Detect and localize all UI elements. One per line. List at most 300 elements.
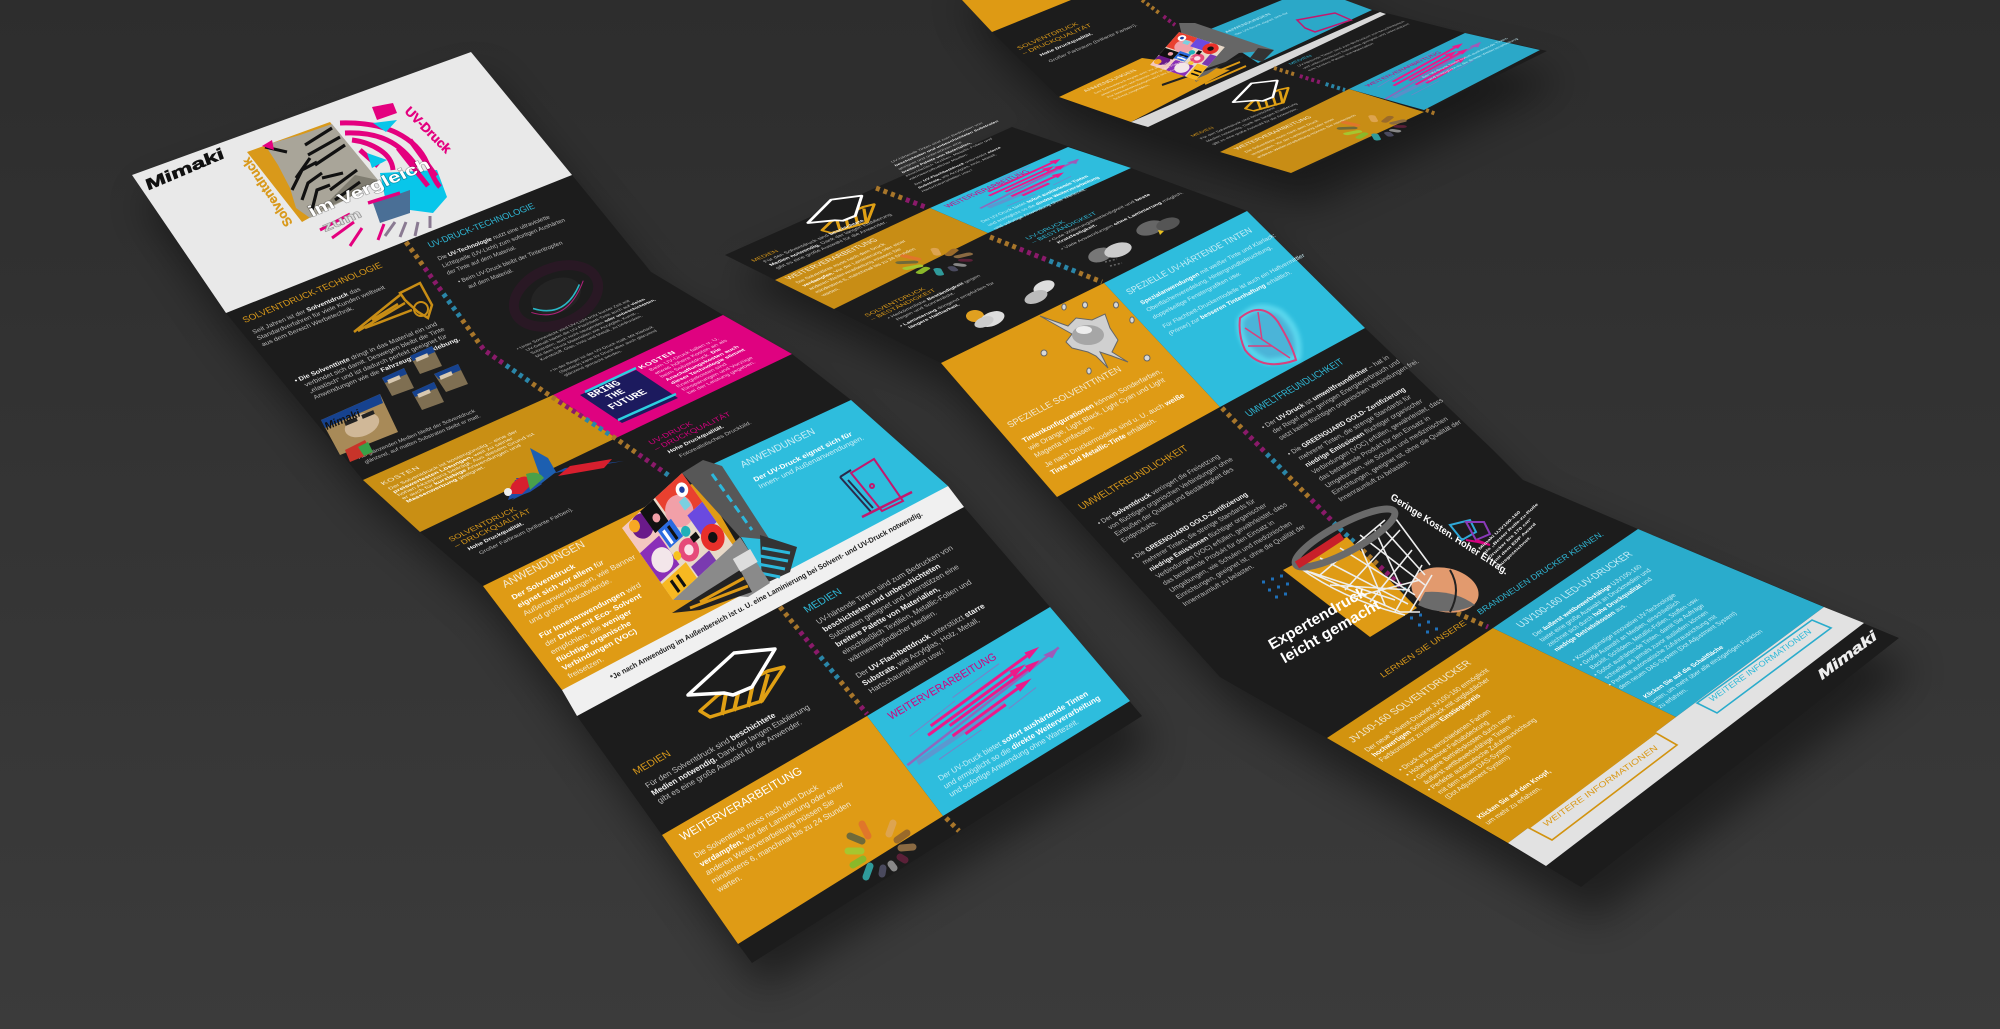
icons: sun and cloud (966, 278, 1056, 330)
text block: medien solvent: Medien notwendig. Dank der langen Etablierung (649, 703, 812, 797)
text block: medien uv: Der UV-Flachbettdruck unterstützt starre (854, 602, 987, 680)
panel: gold spezielle solventtinten (941, 283, 1220, 497)
panel: sheet 1, left brochure (132, 52, 1142, 963)
text: anwendungen small: ANWENDUNGEN (1082, 69, 1139, 93)
panel: gold weiterverarbeitung: verdampfen. Vor der Laminierung oder einer (698, 780, 846, 868)
panel: magenta kosten: Einsparungen und Vorzüge (681, 356, 755, 392)
illustration: bring the future: THE (603, 388, 629, 401)
text block: umweltfreundlichkeit uv: UMWELTFREUNDLICHKEIT (1243, 357, 1347, 419)
panel: cyan spezielle uv-härtende tinten: doppelseitige Fenstergrafiken usw. (1151, 271, 1243, 321)
panel: magenta kosten: beim Solventdruck. Die (659, 347, 724, 379)
icon: spinner small (1331, 113, 1420, 142)
button: weitere informationen gold: WEITERE INFORMATIONEN (1541, 743, 1660, 828)
panel: gold kosten strip (962, 0, 1071, 32)
text: solvent quality small (1016, 4, 1139, 69)
panel: sheet 2, middle brochure (725, 116, 1899, 887)
text: weiterverarbeitung gold small: verdampfen. Vor der Laminierung oder einer (1249, 118, 1336, 156)
logo: Mimaki white: Mimaki (1814, 627, 1881, 682)
panel: cyan weiterverarbeitung small: und ermöglicht so die direkte Weiterverarbeitung (986, 176, 1101, 227)
text block: medien uv small: UV-härtende Tinten sind zum Bedrucken von (890, 121, 984, 164)
panel: sheet 3, top right brochure (962, 0, 1547, 175)
text: UV-Druck: UV-Druck (402, 104, 455, 157)
button: weitere informationen gold (1529, 733, 1677, 840)
text block: uv beständigkeit: • Gute Witterungsbeständigkeit und beste (1047, 193, 1152, 243)
text block: medien uv: Hartschaumplatten usw.! (866, 647, 947, 695)
panel: cyan anwendungen: Der UV-Druck eignet sich für (752, 430, 854, 483)
panel: cyan weiterverarbeitung: Der UV-Druck bietet sofort aushärtende Tinten (936, 689, 1090, 783)
text block: uv druckqualität: Hohe Druckqualität. (667, 424, 726, 455)
text block: medien solvent small: MEDIEN (750, 249, 781, 263)
text block: solventdruck technologie: glänzend, auf matten Substraten bleibt er matt. (364, 414, 483, 465)
panel: gold kosten: KOSTEN (379, 465, 422, 486)
panel: gold weiterverarbeitung: anderen Weiterverarbeitung müssen Sie (704, 797, 837, 877)
panel: cyan UJV100-160: zeichnet sich durch hohe Druckqualität und (1545, 576, 1655, 648)
logo: Mimaki: Mimaki (141, 147, 229, 193)
text block: solventdruck technologie: Standardverfahren für viele Kunden weltweit (256, 285, 387, 342)
text block: medien uv small: geeignet und unterstützen eine (897, 140, 963, 170)
panel: cyan spezielle uv-härtende tinten: Oberflächenveredelung, Hintergrundbeleuchtung, (1145, 244, 1274, 313)
text block: medien uv small: beschichteten und unbeschichteten Substraten (893, 119, 1000, 167)
text: solvent quality small: SOLVENTDRUCK (1016, 22, 1080, 51)
text: Solventdruck: Solventdruck (239, 154, 296, 230)
text: Geringe Kosten: Geringe Kosten. Hoher Ertrag. (1389, 492, 1510, 578)
panel: cyan spezielle uv-härtende tinten (1104, 211, 1365, 407)
text: medien cyan small: UV-härtende Tinten sind zum Bedrucken von beschichteten (1296, 20, 1406, 67)
text block: umweltfreundlichkeit uv: Einrichtungen, geeignet ist, ohne die Qualität der (1331, 419, 1464, 496)
panel: gold weiterverarbeitung (662, 716, 943, 944)
text block: solvent beständigkeit: Regen und Sonnenlicht. (895, 292, 957, 322)
panel: gold JV100-160: JV100-160 SOLVENTDRUCKER (1346, 659, 1475, 745)
text: medien small: MEDIEN (1190, 126, 1216, 138)
text: weiterverarbeitung cyan small (1364, 27, 1520, 98)
panel: gold anwendungen (1059, 58, 1230, 122)
panel: gold spezielle solventtinten: Tintenkonfigurationen können Sonderfarben, (1020, 367, 1164, 444)
panel: gold kosten: er auch für kurzlebige Anwendungen und (401, 444, 523, 501)
icon: door small (1297, 13, 1351, 32)
icon: UV sphere (505, 254, 607, 338)
text: solvent quality small: Hohe Druckqualität. (1039, 32, 1095, 57)
text block: solvent beständigkeit: • Laminierung dringend empfohlen für (899, 281, 996, 328)
icon: media small (1220, 80, 1302, 112)
text block: uv details small: • Unter Sonnenlicht wird UV-Licht trotz kurzer Zeit mit (515, 299, 632, 351)
text: weiterverarbeitung cyan small: WEITERVERARBEITUNG (1364, 51, 1444, 88)
panel: cyan UJV100-160: zu erfahren. (1656, 687, 1690, 710)
text block: uv details small (515, 292, 691, 379)
panel: gold JV100-160: • Druck mit 8 verschiedenen Farben (1396, 708, 1493, 773)
text: anwendungen small: anwendungen, wie Banner und große Plakatwände. (1099, 55, 1197, 96)
panel: gold JV100-160: (Dot Adjustment System) (1443, 754, 1512, 801)
printer billboard small (1150, 23, 1274, 85)
panel: gold anwendungen: empfohlen, die weniger (549, 608, 633, 656)
text block: umweltfreundlichkeit solvent: Innenraumluft zu belasten. (1182, 563, 1256, 608)
panel: gold anwendungen: Der Solventdruck (510, 562, 577, 601)
panel: cyan weiterverarbeitung (867, 607, 1130, 816)
panel: gold spezielle solventtinten: SPEZIELLE SOLVENTTINTEN (1005, 365, 1123, 430)
text block: solventdruck technologie: aus dem Bereich Werbetechnik. (260, 305, 356, 348)
text: anwendungen small: Solvent empfohlen. (1112, 84, 1151, 100)
panel: cyan weiterverarbeitung: und sofortige Anwendung ohne Wartezeit. (947, 717, 1080, 799)
icon: media sheets (688, 649, 784, 717)
panel: cyan UJV100-160: • Große Auswahl an Medien, einschließlich (1578, 599, 1682, 668)
text block: medien uv small: Der UV-Flachbettdruck unterstützt starre (913, 146, 1002, 186)
heading: Expertendruck leicht gemacht: leicht gemacht (1278, 596, 1383, 667)
text: medien cyan small: eine breitere Palette von Materialien (1306, 42, 1375, 72)
text block: solventdruck technologie: • Auf glänzenden Medien bleibt der Solventdruck (354, 409, 477, 462)
panel: magenta kosten: dieser Technologie stimmt (670, 348, 747, 385)
panel: magenta kosten: Energiekosten sind (675, 363, 729, 389)
text block: medien uv small: Substrate, wie Acrylglas, Holz, Metall, (917, 153, 997, 189)
panel: gold spezielle solventtinten: Tinte und Metallic-Tinte erhältlich. (1048, 416, 1158, 476)
text block: uv beständigkeit (1024, 176, 1185, 256)
panel: cyan weiterverarbeitung small: Der UV-Druck bietet sofort aushärtende Tinten (980, 175, 1090, 224)
text block: medien uv: breitere Palette von Materialien, (833, 585, 942, 649)
panel: cyan UJV100-160: UJV100-160 LED-UV-DRUCKER (1514, 550, 1636, 630)
panel: gold JV100-160: • Perfekte automatische Zufuhrausrichtung (1425, 717, 1539, 793)
text block: umweltfreundlichkeit uv: Verbindungen (VOC) erfüllen, gewährleistet, dass (1311, 397, 1446, 476)
panel: white footnote strip: *Je nach Anwendung im Außenbereich ist u. U. eine Laminierung bei Solvent- und UV-Druck notwendig. (608, 509, 924, 682)
text block: solventdruck technologie (241, 253, 509, 472)
panel: gold JV100-160 (1327, 628, 1676, 843)
heading: brandneuen drucker kennen: BRANDNEUEN DRUCKER KENNEN. (1475, 529, 1606, 616)
panel: cyan weiterverarbeitung small (930, 147, 1131, 233)
text: weiterverarbeitung cyan small: und ermöglicht so die direkte Weiterverarbeitung (1426, 37, 1520, 81)
text block: medien solvent small: gibt es eine große Auswahl für die Anwender. (774, 221, 890, 270)
text block: umweltfreundlichkeit uv: mehrerer Tinten, die strenge Standards für (1297, 394, 1414, 462)
text block: umweltfreundlichkeit uv: Innenraumluft zu belasten. (1337, 459, 1412, 503)
icon: trophy (1450, 520, 1490, 545)
panel: gold kosten: hohen Akzeptanz beiträgt. Aus diesem Grund ist (396, 433, 536, 497)
text block: medien uv small: Hartschaumplatten usw.! (920, 168, 973, 193)
panel: magenta kosten: bei der Leistung gegeben. (686, 361, 758, 395)
text block: umweltfreundlichkeit solvent: Einbußen der Qualität und Beständigkeit des (1113, 466, 1236, 538)
panel: cyan spezielle uv-härtende tinten: Spezialanwendungen mit weißer Tinte und Klarlack: (1139, 232, 1278, 306)
panel: gold anwendungen: Außenanwendungen, wie Banner (521, 553, 638, 618)
panel: gold weiterverarbeitung: WEITERVERARBEITUNG (677, 764, 805, 843)
text: weiterverarbeitung gold small: anderen Weiterverarbeitung müssen Sie mindestens (1255, 114, 1357, 159)
panel: gold anwendungen: Für Innenanwendungen wird (537, 581, 643, 640)
panel: gold weiterverarbeitung small: anderen Weiterverarbeitung müssen Sie (807, 248, 904, 291)
text block: umweltfreundlichkeit uv (1243, 330, 1481, 507)
text block: umweltfreundlichkeit solvent: das betreffende Produkt für den Einsatz in (1161, 520, 1277, 587)
icon: door (840, 459, 912, 517)
text: medien small: Für den Solventdruck sind beschichtete (1198, 106, 1277, 140)
panel: gold weiterverarbeitung small (775, 208, 988, 309)
text: medien cyan small: MEDIEN (1288, 54, 1314, 66)
text block: solventdruck technologie: „elastisch“ und ist dadurch perfekt geeignet für (308, 333, 449, 395)
panel: gold weiterverarbeitung small: verdampfen. Vor der Laminierung oder einer (801, 240, 908, 288)
text block: uv beständigkeit: – BESTÄNDIGKEIT (1029, 211, 1100, 245)
panel: cyan weiterverarbeitung small: WEITERVERARBEITUNG (942, 169, 1032, 209)
icon: gold motorbike sketch (354, 283, 432, 332)
text block: solventdruck technologie: Anwendungen wie die Fahrzeugvollverklebung. (312, 336, 462, 401)
panel: white bottom strip (1508, 607, 1864, 866)
text block: medien uv small (890, 116, 1027, 193)
text block: solvent beständigkeit: längere Haltbarkeit. (907, 303, 962, 330)
text block: uv details small: (Spotlack) kann Ihr Druck aber auch glänzend (558, 329, 659, 374)
text block: medien uv: einschließlich Textilien, Metallic-Folien und (840, 578, 974, 656)
text: award: ausgezeichnet. (1498, 535, 1533, 568)
panel: cyan UJV100-160: niedrige Betriebskosten aus. (1553, 603, 1629, 653)
text: weiterverarbeitung gold small: Die Solventtinte muss nach dem Druck (1243, 119, 1321, 153)
panel: gold anwendungen: flüchtige organische (554, 619, 633, 664)
text block: medien solvent small (750, 206, 900, 272)
panel: cyan spezielle uv-härtende tinten: (Primer) zur besseren Tintenhaftung erhältlich. (1167, 269, 1294, 337)
button: weitere informationen cyan (1697, 620, 1831, 713)
panel: cyan anwendungen (1208, 0, 1372, 63)
illustration: printer with billboard (622, 460, 797, 613)
panel: cyan spezielle uv-härtende tinten: Für Flachbett-Druckermodelle ist auch ein Haftvermittler (1161, 253, 1306, 330)
text block: medien uv small: breitere Palette von Materialien, (901, 141, 972, 174)
text block: umweltfreundlichkeit uv: setzt keine flüchtigen organischen Verbindungen frei. (1277, 359, 1421, 442)
text block: uv details small: Mit dem Druck Materialien wie Acrylglas, Kunst-, (534, 311, 640, 358)
panel: gold JV100-160: äußerst wettbewerbsfähige Tinten (1421, 724, 1513, 786)
text block: uv technologie: • Beim UV-Druck bleibt der Tintentropfen (457, 241, 564, 285)
panel: white header (132, 52, 572, 313)
text: anwendungen small: Für Innenanwendungen wird der Druck mit Eco- (1105, 60, 1197, 98)
text block: medien solvent small: Medien notwendig. Dank der langen Etablierung (768, 213, 894, 267)
illustration: bring the future: FUTURE (606, 388, 652, 412)
text block: uv technologie: Die UV-Technologie nutzt eine ultraviolette (437, 215, 552, 262)
text block: uv details small: Kunststoff, Glas, Holz und Metall, zu bedrucken. (539, 314, 645, 362)
text block: uv druckqualität: Fotorealistisches Druckbild. (678, 421, 754, 459)
panel: gold JV100-160: um mehr zu erfahren. (1483, 785, 1544, 826)
text: anwendungen small: Der Solventdruck eignet sich vor allem für Außen- (1092, 55, 1187, 94)
text block: umweltfreundlichkeit solvent: niedrige Emissionen flüchtiger organischer (1148, 502, 1269, 573)
panel: cyan UJV100-160: • Perfekte automatische Zufuhrausrichtung mit (1607, 614, 1719, 688)
text block: solventdruck technologie: Seit Jahren ist der Solventdruck das (251, 286, 363, 335)
panel: cyan weiterverarbeitung: und ermöglicht so die direkte Weiterverarbeitung (942, 694, 1102, 791)
sheet body (725, 127, 1899, 887)
illustration: tiger (247, 103, 447, 246)
panel: gold spezielle solventtinten: Je nach Druckermodelle sind u. U. auch weiße (1042, 391, 1186, 469)
panel: cyan weiterverarbeitung small: und sofortige Anwendung ohne Wartezeit. (992, 188, 1089, 230)
icon: metallic splash (1040, 302, 1150, 374)
text block: solvent druckqualität: Hohe Druckqualität. (467, 521, 526, 552)
text: im Vergleich: im Vergleich (305, 156, 434, 220)
panel: cyan UJV100-160: dem neuen DAS-System (Dot Adjustment System) (1617, 611, 1739, 690)
panel: cyan anwendungen: Innen- und Außenanwendungen. (757, 434, 866, 490)
text: award: Mimaki UJV100-160 (1478, 510, 1522, 551)
text: award: mit dem EDP Award (1493, 522, 1537, 564)
text block: solventdruck technologie: SOLVENTDRUCK-TECHNOLOGIE (241, 261, 385, 325)
panel: gold anwendungen: und große Plakatwände. (527, 577, 613, 626)
text block: solvent druckqualität: SOLVENTDRUCK (447, 506, 519, 543)
panel: gold weiterverarbeitung small: WEITERVERARBEITUNG (783, 237, 880, 281)
text block: umweltfreundlichkeit uv: • Die GREENGUARD GOLD- Zertifizierung (1286, 387, 1408, 457)
panel: cyan anwendungen (700, 400, 948, 585)
panel: gold weiterverarbeitung small: mindestens 6, manchmal bis zu 24 Stunden (814, 247, 918, 294)
icon: arrows small (1363, 36, 1497, 104)
heading: Expertendruck leicht gemacht (1266, 581, 1383, 669)
icon: leaf (1240, 308, 1299, 364)
illustration: bring the future (580, 368, 678, 423)
text block: umweltfreundlichkeit solvent: UMWELTFREUNDLICHKEIT (1076, 444, 1191, 512)
text block: medien solvent small: Für den Solventdruck sind beschichtete (762, 219, 866, 264)
text block: uv beständigkeit: • Viele Anwendungen ohne Laminierung möglich. (1060, 191, 1185, 251)
panel: gold weiterverarbeitung (1220, 89, 1424, 173)
text block: uv druckqualität: UV-DRUCK (647, 420, 695, 446)
panel: magenta kosten (553, 315, 792, 438)
text: anwendungen cyan small: ANWENDUNGEN (1224, 13, 1273, 34)
text block: solvent druckqualität: Großer Farbraum (brillante Farben). (478, 507, 575, 556)
icon: media sheets small (794, 195, 889, 234)
text block: umweltfreundlichkeit solvent: Endprodukts. (1120, 520, 1160, 544)
text block: medien solvent: MEDIEN (631, 749, 673, 777)
text block: medien uv (799, 531, 1011, 695)
panel: gold spezielle solventtinten: Magenta umfassen. (1032, 423, 1096, 459)
text: weiterverarbeitung gold small: WEITERVERARBEITUNG (1233, 115, 1314, 151)
panel: cyan UJV100-160: Backlit, Schildern, Metallic-Folien, Stoffen usw. (1588, 597, 1702, 671)
text: award: als „Bester Rolle-zu-Rolle (1483, 502, 1540, 555)
panel: cyan UJV100-160: Der äußerst wettbewerbsfähige UJV100-160 (1531, 564, 1644, 638)
text block: umweltfreundlichkeit solvent: • Der Solventdruck verringert die Freisetzung (1096, 454, 1222, 527)
text block: solvent druckqualität: – DRUCKQUALITÄT (452, 507, 533, 549)
text: medien small (1190, 96, 1305, 146)
text block: uv beständigkeit: UV-DRUCK (1024, 220, 1067, 241)
text block: medien solvent (631, 681, 818, 805)
text block: uv details small: glänzend gemacht werden. (562, 350, 624, 377)
text block: uv druckqualität (647, 400, 754, 465)
panel: cyan anwendungen: ANWENDUNGEN (738, 426, 818, 470)
icons: rain clouds (1087, 215, 1181, 266)
panel: gold anwendungen: freisetzen. (566, 655, 606, 680)
panel: cyan UJV100-160: • Kostengünstige innovative UV-Technologie (1571, 592, 1678, 663)
panel: cyan UJV100-160: unten, um mehr über alle einzigartigen Funktion (1649, 629, 1765, 705)
panel: gold JV100-160: hochwertigen Solventdruck mit unglaublicher (1370, 676, 1492, 758)
text block: uv technologie: UV-DRUCK-TECHNOLOGIE (426, 201, 537, 250)
panel: cyan weiterverarbeitung: WEITERVERARBEITUNG (886, 651, 999, 722)
panel: gold JV100-160: mit dem neuen DAS-System (1436, 743, 1514, 796)
text block: medien uv: beschichteten und unbeschichteten (821, 562, 943, 634)
heading: lernen sie unsere: LERNEN SIE UNSERE (1378, 618, 1468, 679)
text: award: Drucker bis 170 cm“ (1488, 517, 1534, 559)
panel: gold kosten: Der Solventdruck ist kostengünstig – eine der (387, 430, 519, 491)
text block: uv technologie (426, 195, 582, 294)
text block: uv druckqualität: – DRUCKQUALITÄT (652, 410, 733, 452)
text block: solventdruck technologie: verbindet sich damit. Deswegen bleibt die Tinte (303, 326, 447, 388)
text block: solvent beständigkeit: – BESTÄNDIGKEIT (868, 288, 939, 322)
text block: umweltfreundlichkeit uv: das betreffende Produkt für den Einsatz in (1317, 415, 1432, 483)
illustration: parrot (504, 448, 624, 500)
text block: solvent beständigkeit (863, 266, 1001, 336)
panel: gold kosten: preiswertesten Lösungen, weil zu seiner (392, 437, 515, 494)
panel: cyan UJV100-160: bietet eine große Auswahl an Druckmedien und (1538, 568, 1654, 643)
text block: medien uv small: einschließlich Textilien, Metallic-Folien und (904, 137, 994, 177)
text: zum: zum (319, 206, 364, 235)
panel: magenta kosten: etwas höhere Kosten an als (653, 339, 729, 375)
panel: cyan UJV100-160 (1493, 529, 1824, 717)
text block: solventdruck technologie: • Die Solventtinte dringt in das Material ein und (293, 321, 439, 384)
heading: Expertendruck leicht gemacht: Expertendruck (1266, 583, 1370, 653)
text: award (1478, 498, 1555, 568)
panel: white footnote strip (562, 486, 964, 716)
text block: medien uv: Substrate, wie Acrylglas, Holz, Metall, (860, 616, 982, 687)
text block: umweltfreundlichkeit uv: Umgebungen, wie Schulen und medizinischen (1324, 416, 1450, 489)
text block: uv beständigkeit: Kratzfestigkeit. (1056, 223, 1099, 245)
sheet body (132, 52, 1142, 963)
illustration: bring the future: BRING (585, 379, 625, 400)
button: weitere informationen cyan: WEITERE INFORMATIONEN (1707, 627, 1813, 703)
text: solvent quality small: Großer Farbraum (brillante Farben). (1048, 23, 1139, 64)
fold chevrons (406, 242, 959, 831)
panel: gold kosten: Massenwerbung geeignet. (405, 465, 487, 504)
text: medien small: Medien notwendig. Dank der langen Etablierung (1204, 102, 1299, 143)
panel: gold JV100-160: Klicken Sie auf den Knopf, (1475, 768, 1553, 820)
text block: medien uv small: wärmeempfindlicher Medien. (908, 153, 969, 181)
panel: gold anwendungen: eignet sich vor allem für (515, 558, 606, 609)
panel: gold anwendungen: der Druck mit Eco- Solvent (543, 592, 643, 648)
text block: medien solvent: gibt es eine große Auswahl für die Anwender. (655, 718, 804, 805)
panel: magenta kosten: Anschaffungskosten auch (664, 345, 742, 382)
text: medien cyan small: und unbeschichteten Substraten geeignet und unterstützen (1301, 23, 1411, 69)
text: anwendungen cyan small: Der UV-Druck eignet sich für (1233, 11, 1290, 36)
text block: medien uv: UV-härtende Tinten sind zum Bedrucken von (814, 544, 955, 626)
panel: gold weiterverarbeitung: mindestens 6, manchmal bis zu 24 Stunden (709, 800, 853, 885)
text block: medien uv: MEDIEN (802, 587, 845, 615)
text: medien small: gibt es eine große Auswahl für die Anwender. (1210, 108, 1299, 145)
panel: magenta kosten: KOSTEN (636, 349, 678, 370)
panel: gold kosten (363, 395, 616, 532)
panel: gold anwendungen (483, 480, 770, 690)
panel: cyan UJV100-160: Klicken Sie auf die Schaltfläche (1642, 645, 1726, 700)
text block: uv details small: UV-Gehalt härtet die UV-Flachbett-Tinte auch auf vielen (524, 298, 647, 352)
icon: spinner (848, 823, 913, 877)
panel: gold weiterverarbeitung: Die Solventtinte muss nach dem Druck (692, 783, 821, 860)
panel: gold spezielle solventtinten: wie Orange, Light Black, Light Cyan und Light (1025, 376, 1167, 452)
illustration: sticker car wraps (321, 346, 468, 462)
text block: umweltfreundlichkeit solvent: Verbindungen (VOC) erfüllen, gewährleistet, dass (1155, 502, 1290, 580)
text block: umweltfreundlichkeit solvent: Einrichtungen, geeignet ist, ohne die Qualität der (1175, 523, 1308, 601)
text block: umweltfreundlichkeit uv: der Regel einen geringen Energieverbrauch und (1271, 359, 1402, 435)
text block: umweltfreundlichkeit solvent: mehrerer Tinten, die strenge Standards für (1141, 498, 1258, 566)
text block: medien uv: Substraten geeignet und unterstützen eine (827, 563, 961, 641)
panel: gold weiterverarbeitung: warten. (714, 873, 744, 894)
text block: medien solvent: Für den Solventdruck sind beschichtete (643, 711, 778, 790)
text block: uv technologie: auf dem Material. (467, 268, 515, 290)
text block: umweltfreundlichkeit solvent (1076, 427, 1317, 611)
text block: umweltfreundlichkeit uv: • Der UV-Druck ist umweltfreundlicher – hat in (1260, 355, 1391, 431)
white footnote strip (1131, 12, 1386, 127)
text block: uv details small: Substraten, auch nicht saugenden oder unbeschichteten. (529, 298, 658, 355)
text block: medien uv: wärmeempfindlicher Medien. (845, 609, 939, 664)
text block: solvent beständigkeit: SOLVENTDRUCK (863, 287, 928, 318)
text block: umweltfreundlichkeit solvent: von flüchtigen organischen Verbindungen ohne (1107, 456, 1235, 531)
panel: cyan spezielle uv-härtende tinten: SPEZIELLE UV-HÄRTENDE TINTEN (1124, 226, 1254, 296)
text block: solvent druckqualität (447, 487, 575, 562)
text: solvent quality small: – DRUCKQUALITÄT (1021, 22, 1094, 56)
panel: cyan weiterverarbeitung (1349, 33, 1540, 110)
text block: uv details small: • In der Regel ist der UV-Druck matt. Mit Klarlack (548, 325, 656, 373)
panel: magenta kosten: Beim UV-Druck fallen u. U. (648, 337, 722, 372)
panel: gold anwendungen: ANWENDUNGEN (500, 539, 587, 590)
text block: uv technologie: der Tinte auf dem Material. (446, 245, 518, 276)
text block: umweltfreundlichkeit uv: niedrige Emissionen flüchtiger organischer (1304, 398, 1425, 469)
panel: gold anwendungen: Verbindungen (VOC) (560, 627, 639, 672)
text: weiterverarbeitung gold small (1233, 104, 1357, 159)
panel: gold weiterverarbeitung small: warten. (820, 287, 842, 297)
panel: cyan UJV100-160: • Sofort aushärtende Tinten, damit Sie Aufträge (1592, 603, 1707, 678)
panel: gold weiterverarbeitung small: Die Solventtinte muss nach dem Druck (795, 243, 888, 284)
text block: solvent beständigkeit: • Herkömmliche Beständigkeit gegen (886, 274, 982, 320)
panel: gold JV100-160: Farbkonstanz zu einem Einstiegspreis (1377, 692, 1483, 763)
text block: uv technologie: Lichtquelle (UV-Licht) zum sofortigen Aushärten (441, 218, 567, 269)
text: anwendungen small (1082, 51, 1210, 101)
text: weiterverarbeitung cyan small: Der UV-Druck bietet sofort aushärtende Tinten (1420, 37, 1510, 78)
fold chevrons (1142, 0, 1436, 114)
panel: cyan UJV100-160: schneller als jemals zuvor ausliefern können (1603, 610, 1711, 681)
text block: umweltfreundlichkeit solvent: • Die GREENGUARD GOLD-Zertifizierung (1130, 492, 1250, 562)
panel: gold JV100-160: • Geringere Betriebskosten durch neue, (1411, 712, 1516, 783)
